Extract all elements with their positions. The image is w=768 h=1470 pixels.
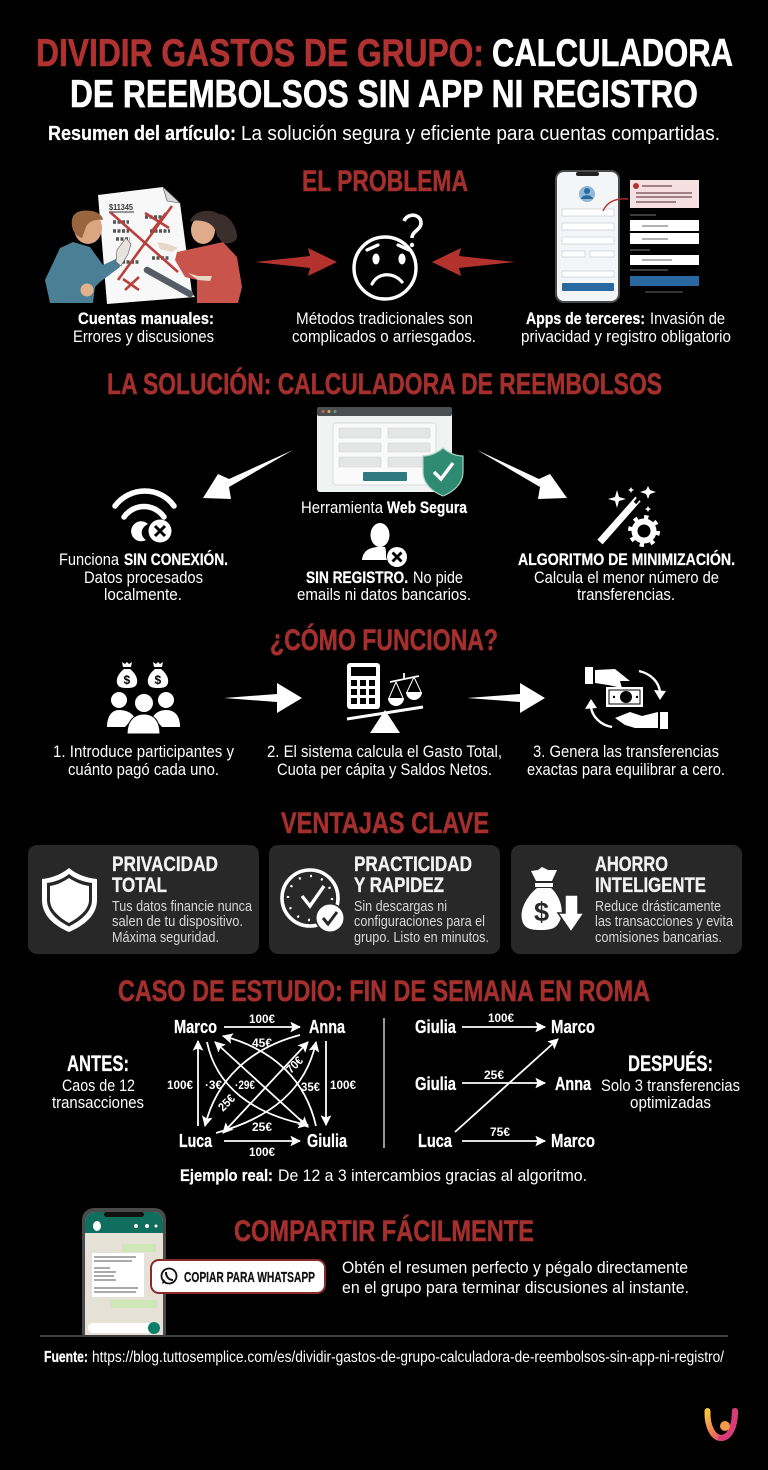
panel: ahorro inteligente: AHORRO: [595, 852, 668, 876]
caption: algoritmo: [518, 550, 735, 604]
panel: ahorro inteligente: INTELIGENTE: [595, 873, 706, 897]
diagram: before, 12 transactions: 25€: [215, 1091, 238, 1114]
label: antes: ANTES:: [67, 1051, 129, 1076]
caption: metodos: [292, 309, 476, 346]
label: herramienta web segura: Herramienta: [301, 498, 383, 517]
label: despues: Solo 3 transferencias: [601, 1076, 740, 1095]
icon: secure web tool window: [317, 407, 463, 496]
diagram: after, 3 transactions: 25€: [484, 1068, 504, 1082]
illustration: manual accounts argument: [45, 187, 242, 304]
panel: privacidad total: salen de tu dispositivo.: [112, 913, 243, 930]
caption: sin registro: [297, 568, 471, 604]
diagram: before, 12 transactions: ·3€: [205, 1078, 222, 1092]
caption: sin conexion: [59, 550, 228, 604]
panel: practicidad y rapidez: Sin descargas ni: [354, 898, 447, 915]
diagram: after, 3 transactions: Luca: [418, 1131, 453, 1151]
diagram: before, 12 transactions: Anna: [309, 1017, 346, 1037]
diagram: before, 12 transactions: 100€: [330, 1078, 356, 1092]
diagram: after, 3 transactions: Giulia: [415, 1074, 457, 1094]
caption: cuentas manuales: Cuentas manuales:: [78, 309, 214, 328]
panel: practicidad y rapidez: [269, 845, 500, 954]
caption: sin conexion: Datos procesados: [84, 568, 203, 587]
icon: participants with money bags: $: [124, 673, 130, 687]
arrow: manual to problem: [255, 248, 337, 276]
panel: ahorro inteligente: [511, 845, 742, 954]
diagram: before, 12 transactions: Giulia: [307, 1131, 348, 1151]
panel: practicidad y rapidez: configuraciones para el: [354, 913, 485, 930]
real example note: De 12 a 3 intercambios gracias al algoritmo.: [278, 1166, 587, 1185]
share description: Obtén el resumen perfecto y pégalo directamente: [342, 1258, 688, 1277]
caption: apps de terceros: Invasión de: [650, 309, 725, 328]
title: DIVIDIR GASTOS DE GRUPO:: [36, 32, 484, 75]
diagram: before, 12 transactions: 45€: [252, 1036, 272, 1050]
icon: magic wand gear: [600, 486, 658, 545]
panel: practicidad y rapidez: PRACTICIDAD: [354, 852, 472, 876]
pen: [147, 270, 190, 294]
heading: el problema: EL PROBLEMA: [302, 165, 468, 198]
caption: sin registro: SIN REGISTRO.: [306, 568, 408, 587]
icon: whatsapp: [162, 1268, 176, 1284]
label: antes: [52, 1051, 144, 1112]
subtitle: Resumen del artículo:: [48, 123, 236, 145]
caption: step 2: [267, 742, 502, 779]
diagram: after, 3 transactions: Marco: [551, 1017, 595, 1037]
icon: money bag with down arrow: $: [534, 897, 549, 927]
subtitle: La solución segura y eficiente para cuentas compartidas.: [241, 123, 720, 145]
label: despues: DESPUÉS:: [628, 1051, 713, 1076]
caption: step 1: 1. Introduce participantes y: [53, 742, 234, 761]
icon: participants with money bags: [107, 662, 180, 734]
caption: step 3: [527, 742, 725, 779]
caption: apps de terceros: [521, 309, 731, 346]
share description: [342, 1258, 689, 1297]
caption: step 1: cuánto pagó cada uno.: [68, 760, 219, 779]
diagram: before, 12 transactions: [167, 1012, 356, 1159]
privacy warning: [603, 180, 699, 211]
caption: step 2: Cuota per cápita y Saldos Netos.: [277, 760, 492, 779]
paper: [98, 187, 195, 304]
diagram: before, 12 transactions: 70€: [283, 1053, 306, 1076]
arrow: to offline: [203, 450, 293, 499]
panel: ahorro inteligente: Reduce drásticamente: [595, 898, 721, 915]
caption: algoritmo: transferencias.: [577, 585, 675, 604]
button: copiar para whatsapp: [151, 1260, 325, 1293]
caption: apps de terceros: Apps de terceres:: [526, 309, 645, 328]
panel: privacidad total: Máxima seguridad.: [112, 929, 219, 946]
share description: en el grupo para terminar discusiones al instante.: [342, 1278, 689, 1297]
diagram: after, 3 transactions: [415, 1011, 595, 1151]
arrow: to algorithm: [477, 450, 567, 499]
form panel: [630, 215, 699, 292]
label: antes: Caos de 12: [62, 1076, 135, 1095]
man: [45, 210, 131, 303]
diagram: before, 12 transactions: ·29€: [235, 1078, 255, 1092]
icon: money exchange hands: [585, 667, 668, 729]
caption: cuentas manuales: Errores y discusiones: [73, 327, 214, 346]
source: Fuente:: [44, 1349, 88, 1366]
panel: privacidad total: Tus datos financie nunca: [112, 898, 253, 915]
icon: shield: [42, 868, 97, 932]
diagram: after, 3 transactions: 100€: [488, 1011, 514, 1025]
illustration: registration phone mockup: [555, 170, 699, 303]
diagram: before, 12 transactions: Marco: [174, 1017, 217, 1037]
caption: apps de terceros: privacidad y registro obligatorio: [521, 327, 731, 346]
diagram: before, 12 transactions: 100€: [249, 1012, 275, 1026]
button: copiar para whatsapp: COPIAR PARA WHATSAPP: [184, 1269, 315, 1286]
caption: algoritmo: Calcula el menor número de: [534, 568, 719, 587]
diagram: before, 12 transactions: 25€: [252, 1120, 272, 1134]
caption: step 3: 3. Genera las transferencias: [533, 742, 719, 761]
label: herramienta web segura: Web Segura: [387, 498, 467, 517]
panel: practicidad y rapidez: Y RAPIDEZ: [354, 873, 444, 897]
label: antes: transacciones: [52, 1093, 144, 1112]
caption: sin conexion: Funciona: [59, 550, 119, 569]
heading: ventajas clave: VENTAJAS CLAVE: [281, 807, 489, 840]
divider: [383, 1018, 385, 1148]
illustration: whatsapp phone: [82, 1208, 166, 1336]
caption: metodos: complicados o arriesgados.: [292, 327, 476, 346]
label: despues: [601, 1051, 740, 1112]
caption: sin conexion: SIN CONEXIÓN.: [124, 550, 228, 569]
arrow: apps to problem: [432, 248, 515, 276]
subtitle: [48, 123, 720, 145]
caption: cuentas manuales: [73, 309, 214, 346]
panel: ahorro inteligente: las transacciones y evita: [595, 913, 734, 930]
woman: [157, 211, 242, 303]
caption: step 3: exactas para equilibrar a cero.: [527, 760, 725, 779]
diagram: before, 12 transactions: 35€: [301, 1080, 320, 1094]
icon: no wifi: [115, 491, 174, 542]
diagram: before, 12 transactions: 100€: [249, 1145, 275, 1159]
icon: confused face: [354, 215, 421, 299]
heading: como funciona: ¿CÓMO FUNCIONA?: [270, 623, 498, 657]
label: despues: optimizadas: [630, 1093, 711, 1112]
panel: ahorro inteligente: comisiones bancarias.: [595, 929, 722, 946]
panel: privacidad total: TOTAL: [112, 873, 167, 897]
icon: participants with money bags: $: [154, 673, 162, 687]
heading: compartir facilmente: COMPARTIR FÁCILMENTE: [234, 1214, 534, 1248]
icon: calculator and scales: [347, 663, 423, 733]
diagram: after, 3 transactions: Anna: [555, 1074, 592, 1094]
panel: privacidad total: [28, 845, 259, 954]
arrow: step 1 to 2: [224, 683, 302, 713]
diagram: before, 12 transactions: Luca: [179, 1131, 213, 1151]
diagram: after, 3 transactions: 75€: [490, 1125, 510, 1139]
caption: step 2: 2. El sistema calcula el Gasto Total,: [267, 742, 502, 761]
caption: sin registro: No pide: [413, 568, 463, 587]
arrow: step 2 to 3: [467, 683, 545, 713]
real example note: Ejemplo real:: [180, 1166, 273, 1185]
logo: [707, 1411, 735, 1438]
diagram: after, 3 transactions: Giulia: [415, 1017, 457, 1037]
caption: sin registro: emails ni datos bancarios.: [297, 585, 471, 604]
icon: no registration user: [362, 523, 407, 567]
icon: clock with check: [282, 870, 345, 933]
caption: sin conexion: localmente.: [104, 585, 182, 604]
panel: practicidad y rapidez: grupo. Listo en minutos.: [354, 929, 489, 946]
paper: $11345: [109, 203, 133, 212]
shield badge: [423, 448, 463, 496]
title: [36, 32, 733, 116]
diagram: before, 12 transactions: 100€: [167, 1078, 193, 1092]
phone: [555, 170, 620, 303]
icon: money bag with down arrow: [522, 867, 584, 932]
panel: privacidad total: PRIVACIDAD: [112, 852, 218, 876]
diagram: after, 3 transactions: Marco: [551, 1131, 595, 1151]
caption: metodos: Métodos tradicionales son: [296, 309, 473, 328]
label: herramienta web segura: [301, 498, 467, 517]
caption: step 1: [53, 742, 234, 779]
